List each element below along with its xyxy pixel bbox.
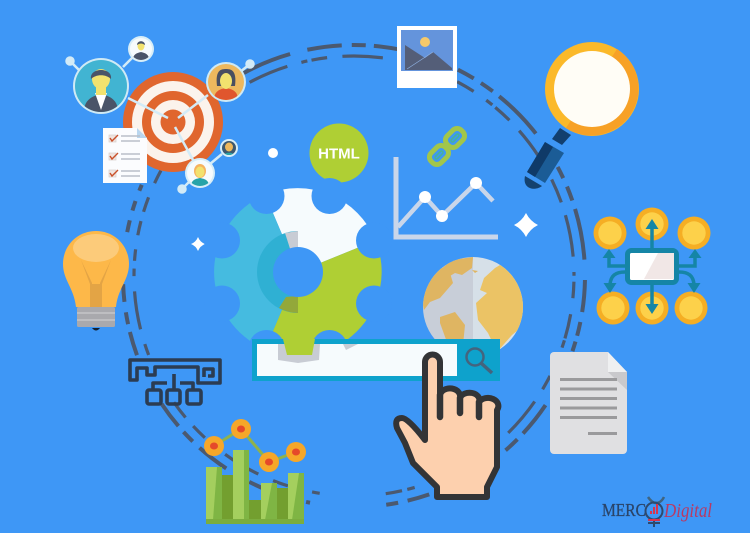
logo: Merc Digital xyxy=(602,497,712,527)
gear inner shadow ring xyxy=(257,231,298,313)
connector lines xyxy=(66,57,254,192)
sparkle right xyxy=(514,213,538,237)
icon: light bulb xyxy=(63,231,129,330)
trend line xyxy=(214,429,296,462)
icon: chain link xyxy=(427,126,467,167)
logo: Merc Digital: MERC xyxy=(602,500,646,520)
logo: Merc Digital: Digital xyxy=(663,500,712,522)
dashed orbit rings xyxy=(123,45,585,507)
search bar xyxy=(252,339,500,381)
icon: green HTML badge: HTML xyxy=(318,146,360,162)
icon: hub network xyxy=(594,208,710,324)
icon: magnifying glass xyxy=(525,42,639,189)
bars xyxy=(206,450,304,524)
icon: globe xyxy=(423,257,523,349)
central panel xyxy=(628,250,676,282)
search icon xyxy=(466,348,492,373)
gear segments xyxy=(214,188,382,356)
target rings xyxy=(123,72,223,172)
gear notches xyxy=(204,178,392,366)
icon: picture frame xyxy=(397,26,457,88)
person: lower woman xyxy=(185,158,215,188)
icon: green HTML badge xyxy=(310,124,368,182)
person: woman xyxy=(206,62,246,102)
decorative white dot xyxy=(268,148,278,158)
icon: document xyxy=(550,352,627,454)
icon: pointing hand xyxy=(396,355,498,497)
sparkle left xyxy=(191,237,205,251)
person: small woman xyxy=(220,139,238,157)
trend points xyxy=(204,419,306,472)
yellow nodes xyxy=(594,208,710,324)
checklist xyxy=(103,128,147,183)
icon: green bar chart with orange points xyxy=(204,419,306,524)
gear hole xyxy=(273,247,323,297)
person: large man xyxy=(73,58,129,114)
line chart xyxy=(396,157,498,237)
icon: gear xyxy=(204,178,382,341)
person: small top man xyxy=(128,36,154,62)
arrows xyxy=(609,226,695,308)
icon: target with audience people xyxy=(66,36,254,192)
icon: organisation structure xyxy=(130,360,220,404)
